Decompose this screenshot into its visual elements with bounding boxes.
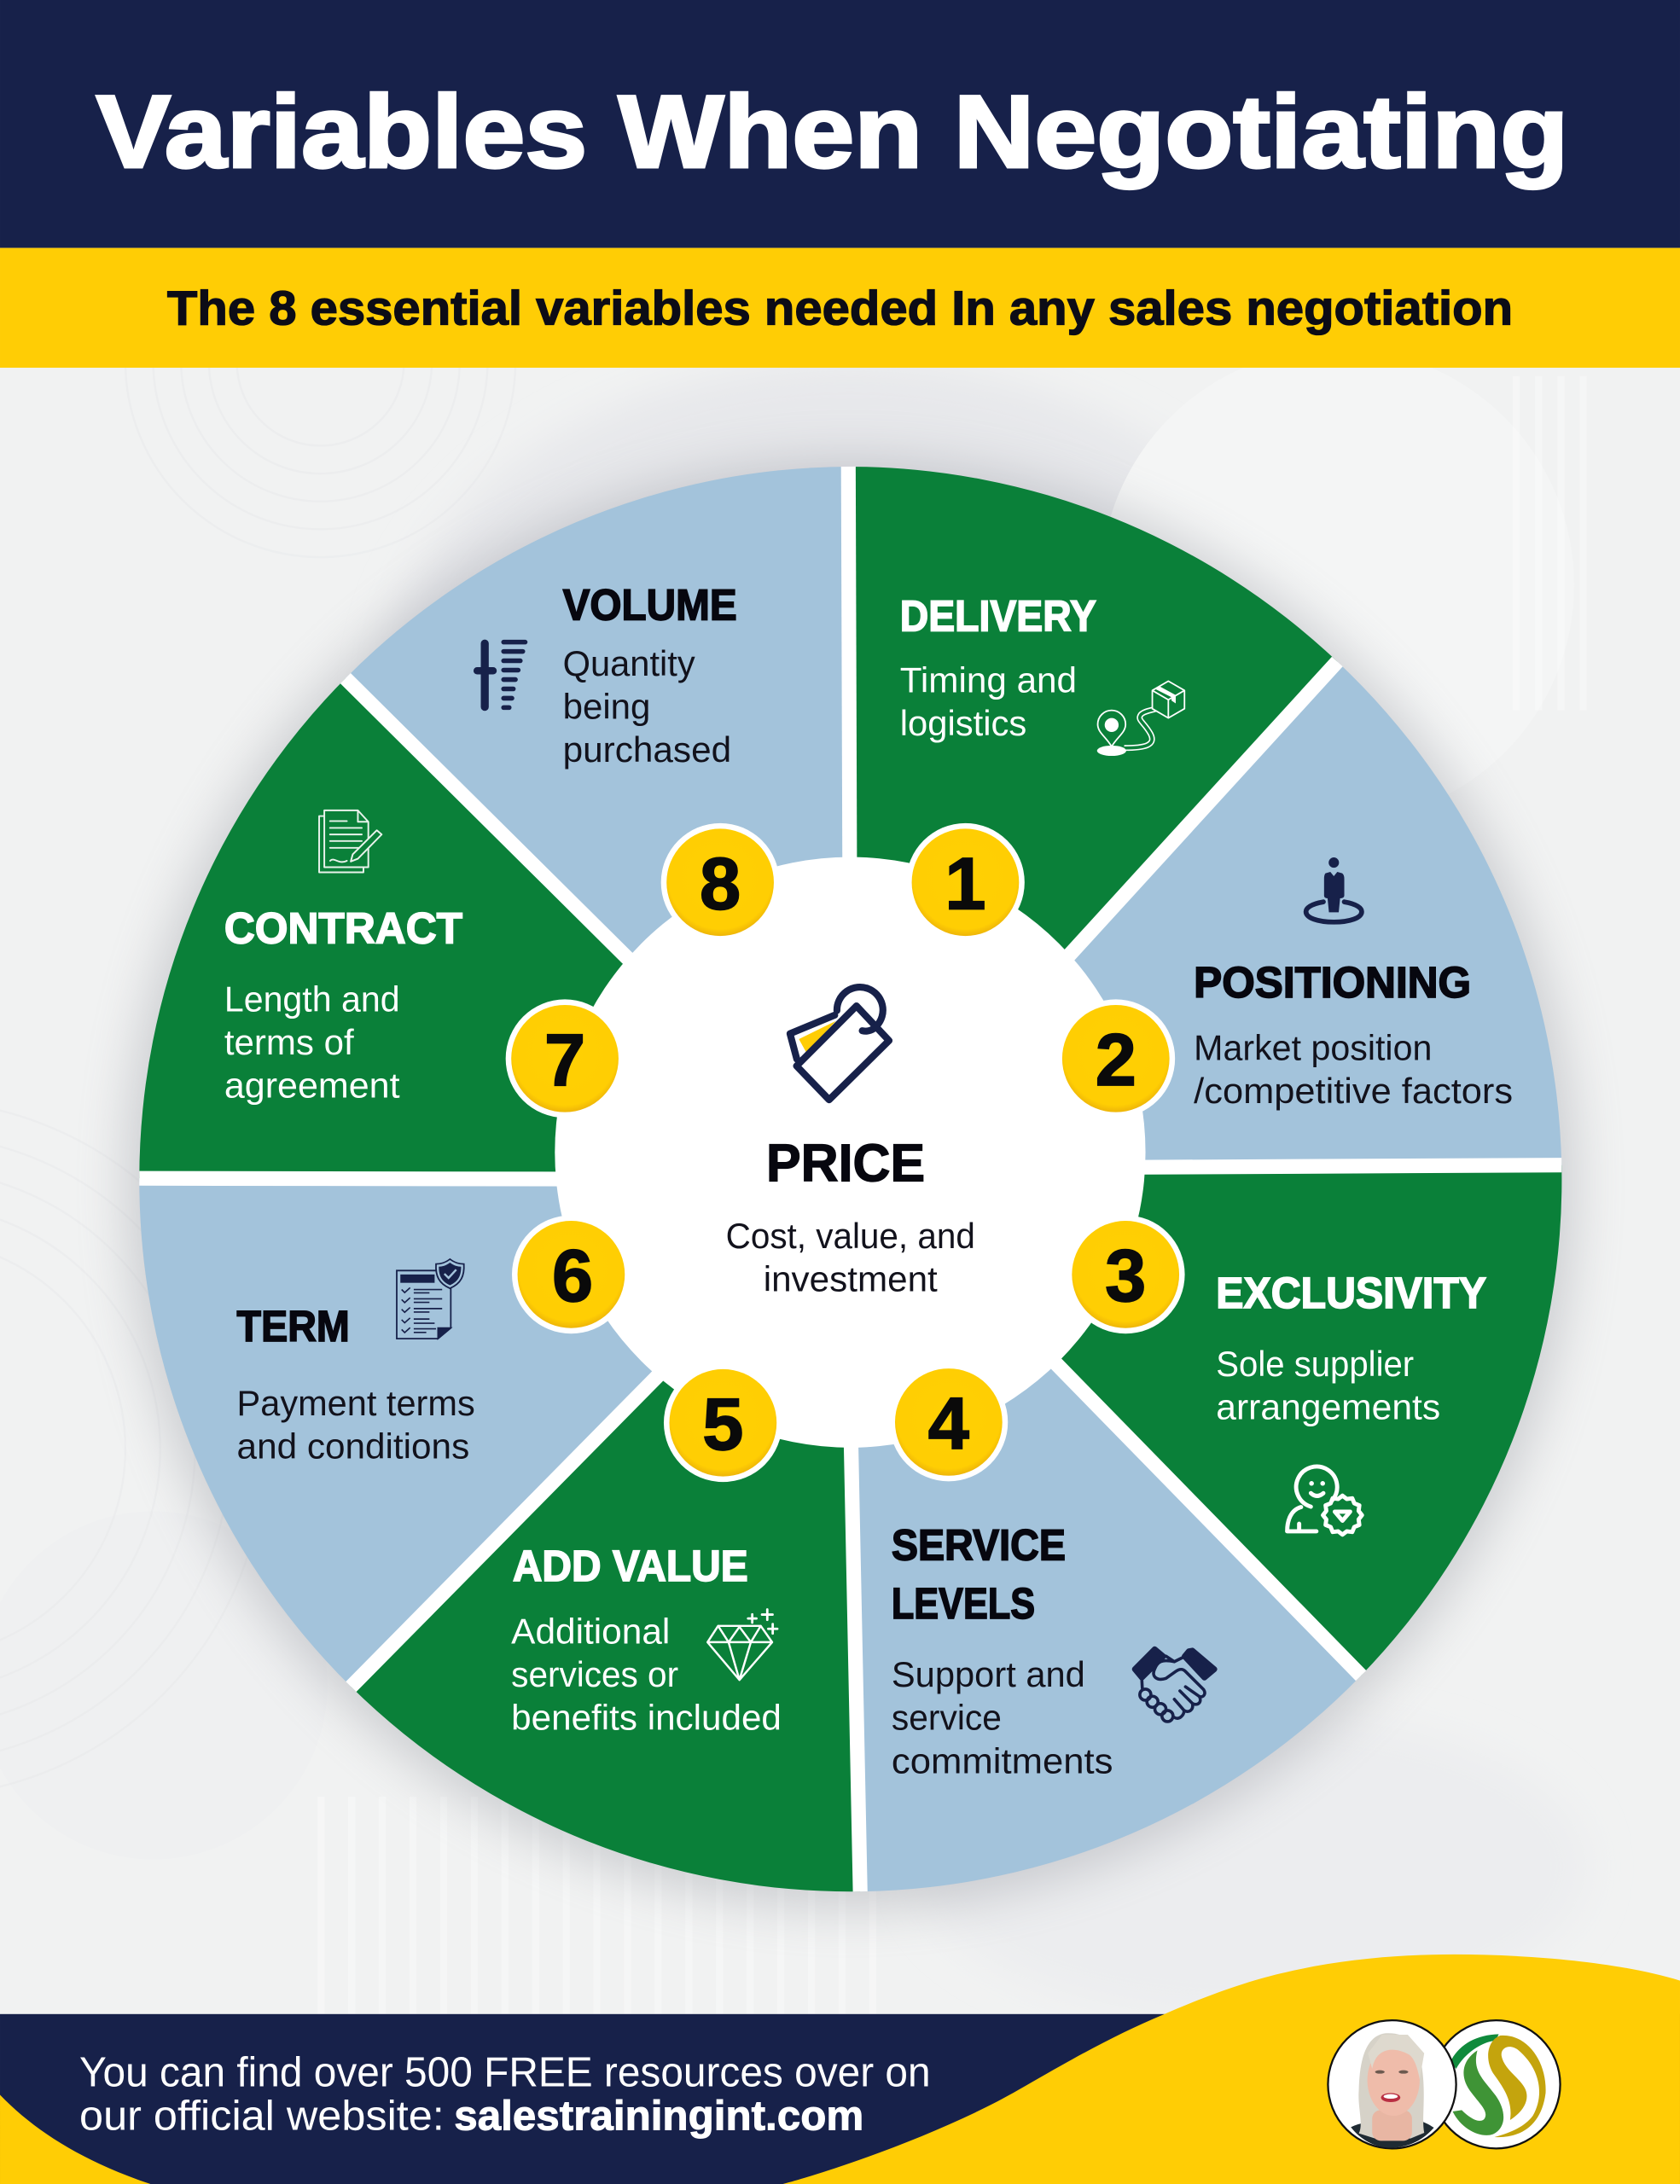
badge 3: 3 (1105, 1235, 1146, 1317)
title: Variables When Negotiating (96, 74, 1568, 189)
text: term: Payment terms (237, 1383, 475, 1423)
text: delivery (900, 659, 1077, 743)
badge 1 (906, 823, 1025, 942)
spokes (139, 467, 1561, 1891)
icon: price tags (790, 987, 889, 1100)
text: contract: terms of (224, 1022, 354, 1062)
heading: service levels (892, 1521, 1066, 1628)
badge 3 (1067, 1215, 1185, 1333)
badge 8: 8 (700, 843, 741, 925)
text: price (726, 1216, 975, 1298)
centre circle (555, 857, 1146, 1448)
text: service levels: service (892, 1698, 1002, 1738)
icon: person on target (1306, 857, 1362, 922)
footer text: salestrainingint.com (454, 2093, 863, 2139)
wheel shadow (126, 460, 1575, 1908)
subtitle band (0, 248, 1680, 368)
icon: smiling customer badge (1288, 1467, 1362, 1535)
heading: volume: VOLUME (563, 581, 737, 630)
icon: diamond (707, 1610, 777, 1680)
text: add value: Additional (511, 1612, 670, 1652)
badge 6: 6 (552, 1235, 593, 1317)
heading: service levels: LEVELS (892, 1579, 1035, 1628)
icon: delivery route (1097, 681, 1184, 756)
panel: service levels (850, 1156, 1361, 1891)
panel: positioning (850, 662, 1561, 1167)
text: positioning: Market position (1194, 1027, 1432, 1067)
badge 7 (506, 999, 624, 1118)
badge 2: 2 (1096, 1019, 1136, 1101)
badge 4 (889, 1363, 1008, 1481)
badge 4: 4 (928, 1383, 969, 1465)
text: service levels (892, 1654, 1113, 1780)
heading: term: TERM (237, 1302, 350, 1350)
text: delivery: Timing and (900, 659, 1077, 700)
footer curve: right (783, 1955, 1680, 2184)
panel: term (139, 1156, 850, 1687)
badge 8 (661, 823, 779, 942)
text: volume: being (563, 686, 650, 726)
text: add value: benefits included (511, 1698, 782, 1738)
footer text: our official website: (79, 2093, 445, 2139)
heading: exclusivity: EXCLUSIVITY (1216, 1269, 1486, 1317)
icon: volume slider (477, 642, 526, 707)
text: term (237, 1383, 475, 1466)
badge 5 (664, 1363, 782, 1482)
footer text (79, 2050, 931, 2139)
text: positioning (1194, 1027, 1513, 1111)
text: service levels: commitments (892, 1740, 1113, 1780)
icon: handshake (1135, 1649, 1214, 1722)
text: contract (224, 979, 400, 1106)
header band (0, 0, 1680, 248)
panel: contract (139, 678, 850, 1179)
heading: price: PRICE (766, 1134, 925, 1193)
portrait (1328, 2020, 1456, 2148)
text: price: Cost, value, and (726, 1216, 975, 1256)
panel: delivery (848, 467, 1337, 1156)
panel: exclusivity (850, 1156, 1561, 1676)
badge 5: 5 (702, 1384, 743, 1466)
footer text: You can find over 500 FREE resources over on (79, 2050, 931, 2096)
text: volume: purchased (563, 729, 731, 770)
badge 1: 1 (945, 843, 986, 925)
subtitle: The 8 essential variables needed In any sales negotiation (167, 281, 1513, 334)
badge 2 (1056, 999, 1175, 1118)
heading: add value: ADD VALUE (513, 1542, 748, 1590)
text: contract: Length and (224, 979, 400, 1019)
icon: signed contract (319, 810, 381, 873)
badge 6 (512, 1215, 631, 1333)
text: contract: agreement (224, 1066, 400, 1106)
text: service levels: Support and (892, 1654, 1085, 1694)
text: exclusivity: Sole supplier (1216, 1344, 1414, 1384)
heading: contract: CONTRACT (224, 903, 462, 952)
text: positioning: /competitive factors (1194, 1071, 1513, 1111)
text: add value (511, 1612, 782, 1738)
text: volume (563, 643, 731, 770)
text: price: investment (764, 1258, 938, 1298)
text: term: and conditions (237, 1426, 469, 1466)
text: volume: Quantity (563, 643, 695, 683)
icon: checklist with shield (397, 1259, 464, 1339)
heading: positioning: POSITIONING (1194, 958, 1471, 1007)
badge 7: 7 (544, 1019, 585, 1101)
footer curve: left (0, 2095, 150, 2184)
heading: service levels: SERVICE (892, 1521, 1066, 1570)
footer band (0, 2014, 1680, 2184)
text: exclusivity: arrangements (1216, 1387, 1440, 1427)
logo badge (1432, 2020, 1561, 2148)
text: add value: services or (511, 1654, 678, 1694)
panel: add value (351, 1156, 860, 1891)
panel: volume (346, 467, 850, 1156)
text: exclusivity (1216, 1344, 1440, 1427)
heading: delivery: DELIVERY (900, 592, 1096, 641)
text: delivery: logistics (900, 703, 1026, 743)
